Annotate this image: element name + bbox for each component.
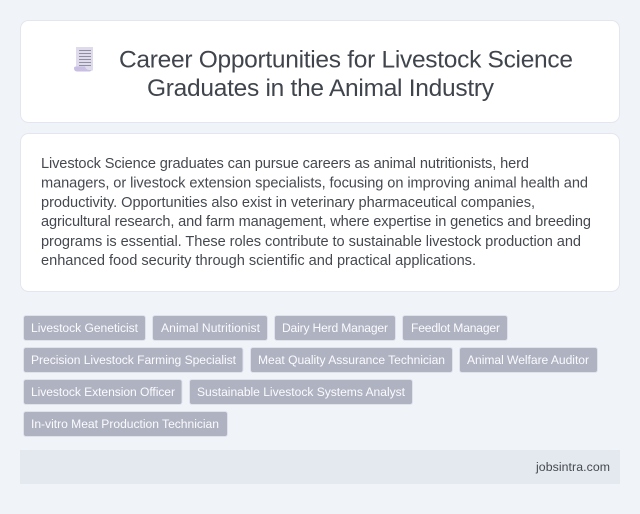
tag: Sustainable Livestock Systems Analyst: [190, 380, 412, 404]
tag: Animal Nutritionist: [152, 316, 268, 340]
panel: career tags: [24, 316, 598, 436]
panel: summary card: [20, 134, 620, 292]
footer source text: jobsintra.com: [535, 460, 610, 474]
tag: In-vitro Meat Production Technician: In-vitro Meat Production Technician: [31, 417, 219, 431]
summary paragraph: agricultural research, and farm management, where expertise in genetics and breeding: [41, 214, 591, 230]
tag: Feedlot Manager: Feedlot Manager: [411, 321, 500, 335]
tag: Animal Nutritionist: Animal Nutritionist: [161, 321, 261, 335]
tag: Dairy Herd Manager: Dairy Herd Manager: [282, 321, 388, 335]
summary paragraph: programs is essential. These roles contribute to sustainable livestock production and: [41, 234, 581, 250]
summary paragraph: managers, or livestock extension specialists, focusing on improving animal health and: [41, 176, 588, 192]
tag: Livestock Extension Officer: Livestock Extension Officer: [31, 385, 175, 399]
summary paragraph: [41, 156, 591, 269]
tag: Precision Livestock Farming Specialist: Precision Livestock Farming Specialist: [31, 353, 237, 367]
title: [119, 46, 573, 102]
title: Graduates in the Animal Industry: [147, 75, 495, 102]
tag: Livestock Extension Officer: [24, 380, 182, 404]
tag: Meat Quality Assurance Technician: Meat Quality Assurance Technician: [258, 353, 445, 367]
tag: Dairy Herd Manager: [274, 316, 396, 340]
tag: Animal Welfare Auditor: Animal Welfare Auditor: [467, 353, 589, 367]
title: Career Opportunities for Livestock Science: [119, 46, 573, 74]
tag: Sustainable Livestock Systems Analyst: Sustainable Livestock Systems Analyst: [197, 385, 406, 399]
tag: Feedlot Manager: [402, 316, 508, 340]
footer bar: [20, 450, 620, 484]
tag: Livestock Geneticist: Livestock Geneticist: [31, 321, 139, 335]
panel: title card: [20, 20, 620, 122]
tag: In-vitro Meat Production Technician: [24, 412, 228, 436]
summary paragraph: productivity. Opportunities also exist in veterinary pharmaceutical companies,: [41, 195, 535, 211]
summary paragraph: enhanced food security through scientific and practical applications.: [41, 253, 476, 269]
tag: Precision Livestock Farming Specialist: [24, 348, 243, 372]
tag: Livestock Geneticist: [24, 316, 146, 340]
summary paragraph: Livestock Science graduates can pursue careers as animal nutritionists, herd: [41, 156, 529, 172]
icon: document scroll: [74, 47, 93, 72]
tag: Meat Quality Assurance Technician: [250, 348, 452, 372]
tag: Animal Welfare Auditor: [460, 348, 598, 372]
